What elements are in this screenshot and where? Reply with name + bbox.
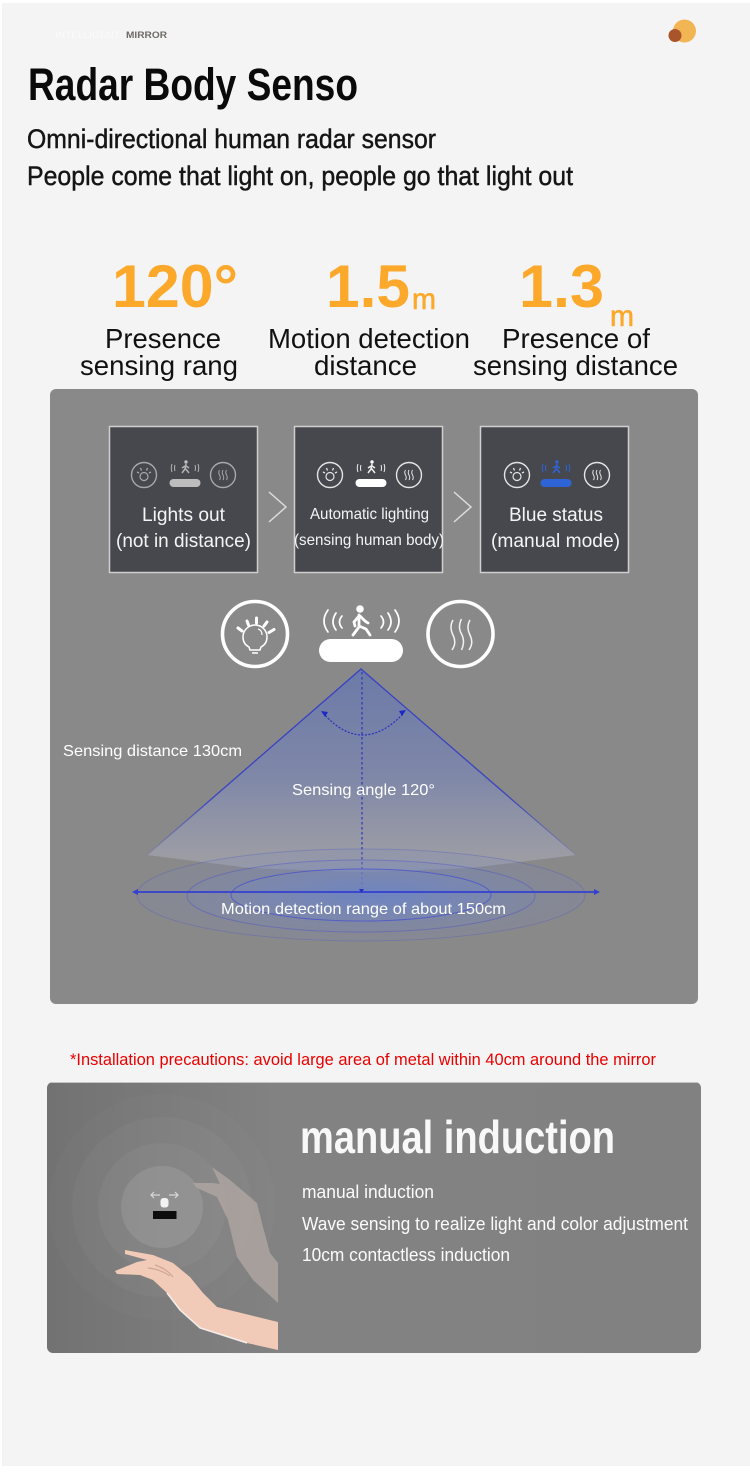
card: automatic lighting: Automatic lighting <box>310 506 429 523</box>
chart: motion detection ellipses <box>132 849 600 941</box>
label: sensing distance: Sensing distance 130cm <box>63 743 242 760</box>
text block: manual induction description <box>302 1182 688 1265</box>
card: lights out: (not in distance) <box>116 531 251 552</box>
warning text: *Installation precautions: avoid large area of metal within 40cm around the mirror <box>70 1051 656 1069</box>
subtitle: People come that light on, people go that light out <box>27 161 573 191</box>
stat: 1.5 m: Motion detection <box>268 323 470 354</box>
card: lights out: Lights out <box>142 505 226 526</box>
panel: manual induction <box>47 1082 701 1353</box>
card: blue status: (manual mode) <box>491 531 620 552</box>
subtitle <box>27 124 573 191</box>
icon: light bulb button <box>222 602 288 666</box>
chart: sensing cone <box>147 669 576 888</box>
stat: 1.5 m: m <box>412 283 436 316</box>
stat: 1.5 m <box>268 253 470 381</box>
panel: radar sensing <box>50 389 698 1004</box>
icon: logo dots <box>668 20 696 42</box>
card: automatic lighting: (sensing human body) <box>294 532 444 549</box>
icon: heat waves button <box>428 602 493 666</box>
card: blue status <box>480 426 628 572</box>
icon: radar walking person sensor <box>319 605 403 662</box>
heading: manual induction: manual induction <box>300 1111 615 1163</box>
stat: 1.3 m: sensing distance <box>473 350 678 381</box>
icon: swipe gesture <box>151 1192 178 1219</box>
illustration: wave hand sensing <box>98 1143 278 1350</box>
label: sensing angle: Sensing angle 120° <box>292 782 435 799</box>
stat: 120 degrees <box>80 253 238 381</box>
title: Radar Body Senso <box>28 59 358 110</box>
brand label: MIRROR <box>126 30 167 41</box>
stat: 120 degrees: 120° <box>112 253 238 320</box>
text block: manual induction description: manual induction <box>302 1182 434 1202</box>
stat: 1.3 m: m <box>610 300 634 333</box>
stat: 1.5 m: 1.5 <box>326 253 410 320</box>
card: lights out <box>110 426 258 572</box>
stat: 1.3 m: 1.3 <box>519 253 604 320</box>
card: blue status: Blue status <box>509 505 603 526</box>
brand label <box>55 30 167 41</box>
stat: 120 degrees: Presence <box>105 323 221 354</box>
card: automatic lighting <box>294 426 444 572</box>
brand label: INTELLIGENT <box>55 30 120 41</box>
label: motion range: Motion detection range of about 150cm <box>221 901 506 918</box>
stat: 1.3 m <box>473 253 678 381</box>
arrow: step two to three <box>454 492 471 522</box>
arrow: step one to two <box>269 492 286 522</box>
stat: 1.3 m: Presence of <box>502 323 650 354</box>
text block: manual induction description: 10cm contactless induction <box>302 1245 510 1265</box>
hand: ghost upper hand <box>193 1167 278 1303</box>
stat: 1.5 m: distance <box>314 350 417 381</box>
hand: front hand <box>115 1250 278 1350</box>
text block: manual induction description: Wave sensing to realize light and color adjustment <box>302 1214 688 1234</box>
stat: 120 degrees: sensing rang <box>80 350 238 381</box>
subtitle: Omni-directional human radar sensor <box>27 124 436 154</box>
